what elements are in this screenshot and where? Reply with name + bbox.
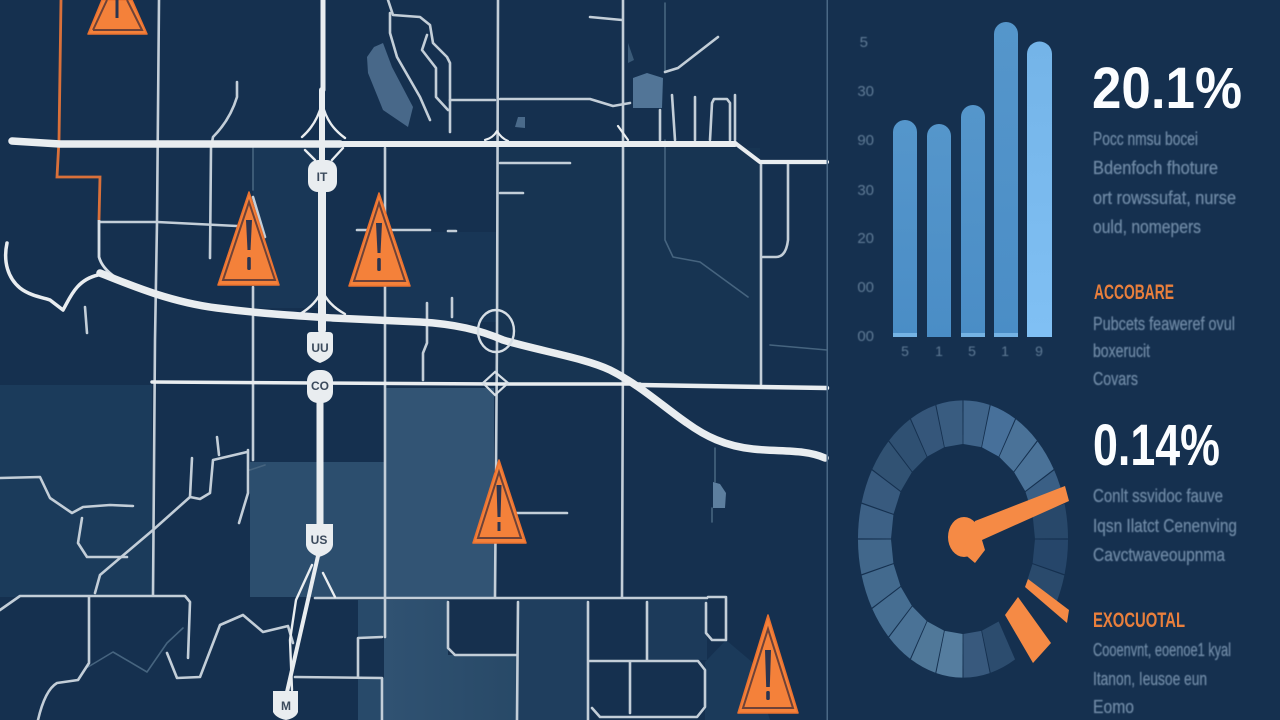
highway shield 1: IT	[317, 170, 328, 184]
stat description: Pocc nmsu bocei	[1093, 129, 1198, 149]
stat description: ould, nomepers	[1093, 217, 1201, 237]
x axis labels: 5	[968, 343, 976, 359]
stat description: Conlt ssvidoc fauve	[1093, 486, 1223, 506]
map district shading	[0, 148, 770, 720]
y axis labels: 00	[857, 328, 874, 345]
highway shield 3: CO	[311, 379, 329, 393]
y axis labels: 00	[857, 279, 874, 296]
y axis labels	[857, 34, 874, 345]
top landmark shapes	[367, 43, 726, 508]
panel divider	[826, 0, 828, 720]
bar chart	[857, 22, 1052, 359]
highway shield 4	[306, 524, 333, 557]
callout text	[1093, 314, 1235, 389]
callout text: boxerucit	[1093, 341, 1150, 361]
highway shield 2: UU	[311, 341, 329, 355]
icon: warning triangle lower	[473, 460, 526, 543]
callout text: Eomo	[1093, 697, 1134, 717]
stat block: 0.14%	[1093, 413, 1237, 565]
faint secondary roads	[88, 3, 827, 672]
bars	[893, 22, 1052, 337]
gauge orange tick	[1025, 579, 1069, 623]
highway shield 2	[307, 332, 333, 363]
x axis labels: 1	[1001, 343, 1009, 359]
y axis labels: 90	[857, 132, 874, 149]
stat description	[1093, 129, 1236, 237]
highway shield 5: M	[281, 699, 291, 713]
highway shield 1	[308, 160, 337, 192]
y axis labels: 30	[857, 182, 874, 199]
callout text: Pubcets feaweref ovul	[1093, 314, 1235, 334]
gauge segments	[857, 399, 1069, 679]
interchanges	[300, 103, 628, 395]
gauge needle	[948, 486, 1069, 563]
callout text	[1093, 640, 1231, 717]
icon: warning triangle bottom right	[738, 615, 798, 713]
gauge chart	[857, 399, 1069, 679]
stat description	[1093, 486, 1237, 565]
y axis labels: 5	[860, 34, 868, 51]
orange boundary line	[57, 0, 115, 277]
highway shield 4: US	[311, 533, 327, 547]
minor street grid	[0, 0, 788, 720]
panel: road map	[0, 0, 827, 720]
callout: orange heading block two	[1093, 609, 1231, 717]
y axis labels: 30	[857, 83, 874, 100]
stat value: 20.1%	[1092, 56, 1242, 121]
x axis labels	[901, 343, 1043, 359]
callout heading: ACCOBARE	[1094, 281, 1174, 304]
callout: orange heading block one	[1093, 281, 1235, 389]
icon: warning triangle left	[218, 192, 279, 285]
stat description: Cavctwaveoupnma	[1093, 545, 1226, 565]
stat block: 20.1%	[1092, 56, 1242, 237]
x axis labels: 9	[1035, 343, 1043, 359]
y axis labels: 20	[857, 230, 874, 247]
stat description: Iqsn Ilatct Cenenving	[1093, 516, 1237, 536]
x axis labels: 5	[901, 343, 909, 359]
x axis labels: 1	[935, 343, 943, 359]
major highways	[6, 0, 827, 692]
highway shield 3	[307, 370, 333, 403]
icon: warning triangle top	[88, 0, 147, 34]
callout heading: EXOCUOTAL	[1093, 609, 1185, 632]
callout text: Covars	[1093, 369, 1138, 389]
stat description: Bdenfoch fhoture	[1093, 158, 1218, 178]
gauge orange wedge	[1005, 597, 1051, 663]
callout text: Itanon, Ieusoe eun	[1093, 669, 1207, 689]
stat value: 0.14%	[1093, 413, 1220, 478]
highway shield 5	[273, 691, 298, 720]
stat description: ort rowssufat, nurse	[1093, 188, 1236, 208]
icon: warning triangle center	[349, 193, 410, 286]
